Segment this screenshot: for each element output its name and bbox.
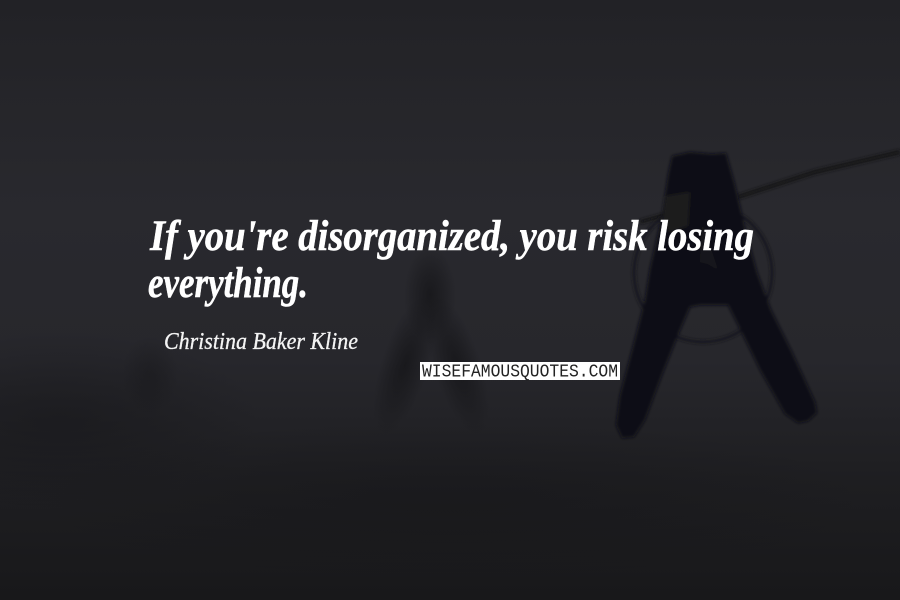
- blurred background clothespin: [122, 245, 502, 441]
- clothespin: [616, 152, 817, 438]
- quote text: [148, 213, 754, 307]
- clothespin highlight: [662, 192, 690, 232]
- author: Christina Baker Kline: [164, 329, 358, 355]
- spring ring: [634, 204, 772, 342]
- quote line 1: If you're disorganized, you risk losing: [149, 213, 754, 260]
- quote line 2: everything.: [148, 260, 308, 307]
- clothespin body: [616, 152, 817, 438]
- clothesline: [640, 152, 900, 222]
- watermark logo: WISEFAMOUSQUOTES.COM: [422, 362, 618, 382]
